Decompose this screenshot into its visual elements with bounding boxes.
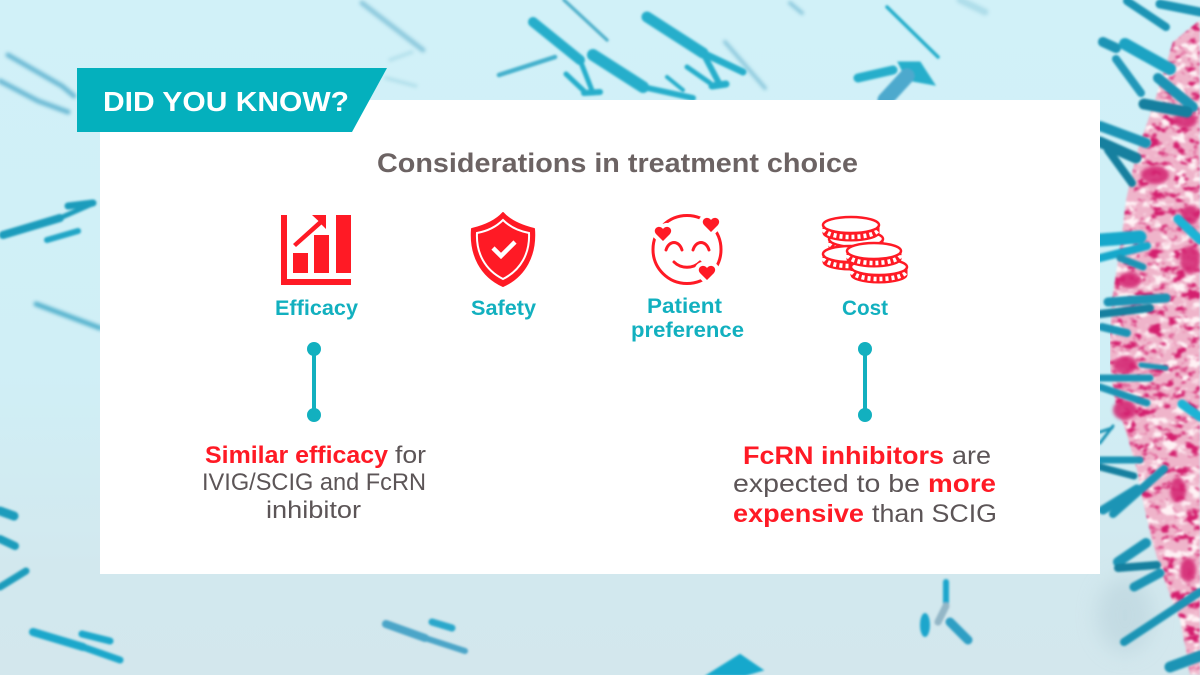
connector: cost bbox=[858, 342, 872, 422]
text block: efficacy finding: for bbox=[395, 442, 426, 469]
icon: coin stacks bbox=[823, 217, 907, 283]
text block: efficacy finding bbox=[202, 442, 426, 524]
label: patient preference bbox=[631, 295, 744, 342]
patient preference column bbox=[631, 216, 744, 342]
icon: smiling face with hearts bbox=[653, 216, 721, 284]
text block: efficacy finding: IVIG/SCIG and FcRN bbox=[202, 469, 426, 496]
efficacy column bbox=[275, 215, 358, 320]
cell body bbox=[1110, 20, 1200, 675]
label: efficacy: Efficacy bbox=[275, 297, 358, 320]
connector: efficacy bbox=[307, 342, 321, 422]
banner: did you know: DID YOU KNOW? bbox=[103, 86, 349, 117]
text block: efficacy finding: Similar efficacy bbox=[205, 442, 389, 469]
label: patient preference: Patient bbox=[647, 295, 722, 318]
text block: efficacy finding: inhibitor bbox=[266, 497, 361, 524]
text block: cost finding: expected to be bbox=[733, 470, 920, 498]
text block: cost finding: are bbox=[952, 442, 991, 470]
label: patient preference: preference bbox=[631, 319, 744, 342]
magenta patches on the cell bbox=[1113, 112, 1200, 582]
icon: bar chart with arrow bbox=[281, 215, 351, 285]
soft shadow near cell bbox=[1097, 577, 1153, 653]
label: cost: Cost bbox=[842, 297, 888, 320]
text block: cost finding bbox=[733, 442, 997, 528]
spike proteins on the cell bbox=[1100, 1, 1200, 667]
text block: cost finding: expensive bbox=[733, 500, 864, 528]
title: Considerations in treatment choice bbox=[377, 148, 858, 178]
text block: cost finding: FcRN inhibitors bbox=[743, 442, 944, 470]
cost column bbox=[823, 217, 907, 320]
label: safety: Safety bbox=[471, 297, 536, 320]
white panel bbox=[100, 100, 1100, 574]
text block: cost finding: more bbox=[928, 470, 996, 498]
banner: did you know bbox=[77, 68, 387, 132]
icon: shield with check bbox=[472, 213, 534, 286]
safety column bbox=[471, 213, 536, 320]
text block: cost finding: than SCIG bbox=[872, 500, 997, 528]
